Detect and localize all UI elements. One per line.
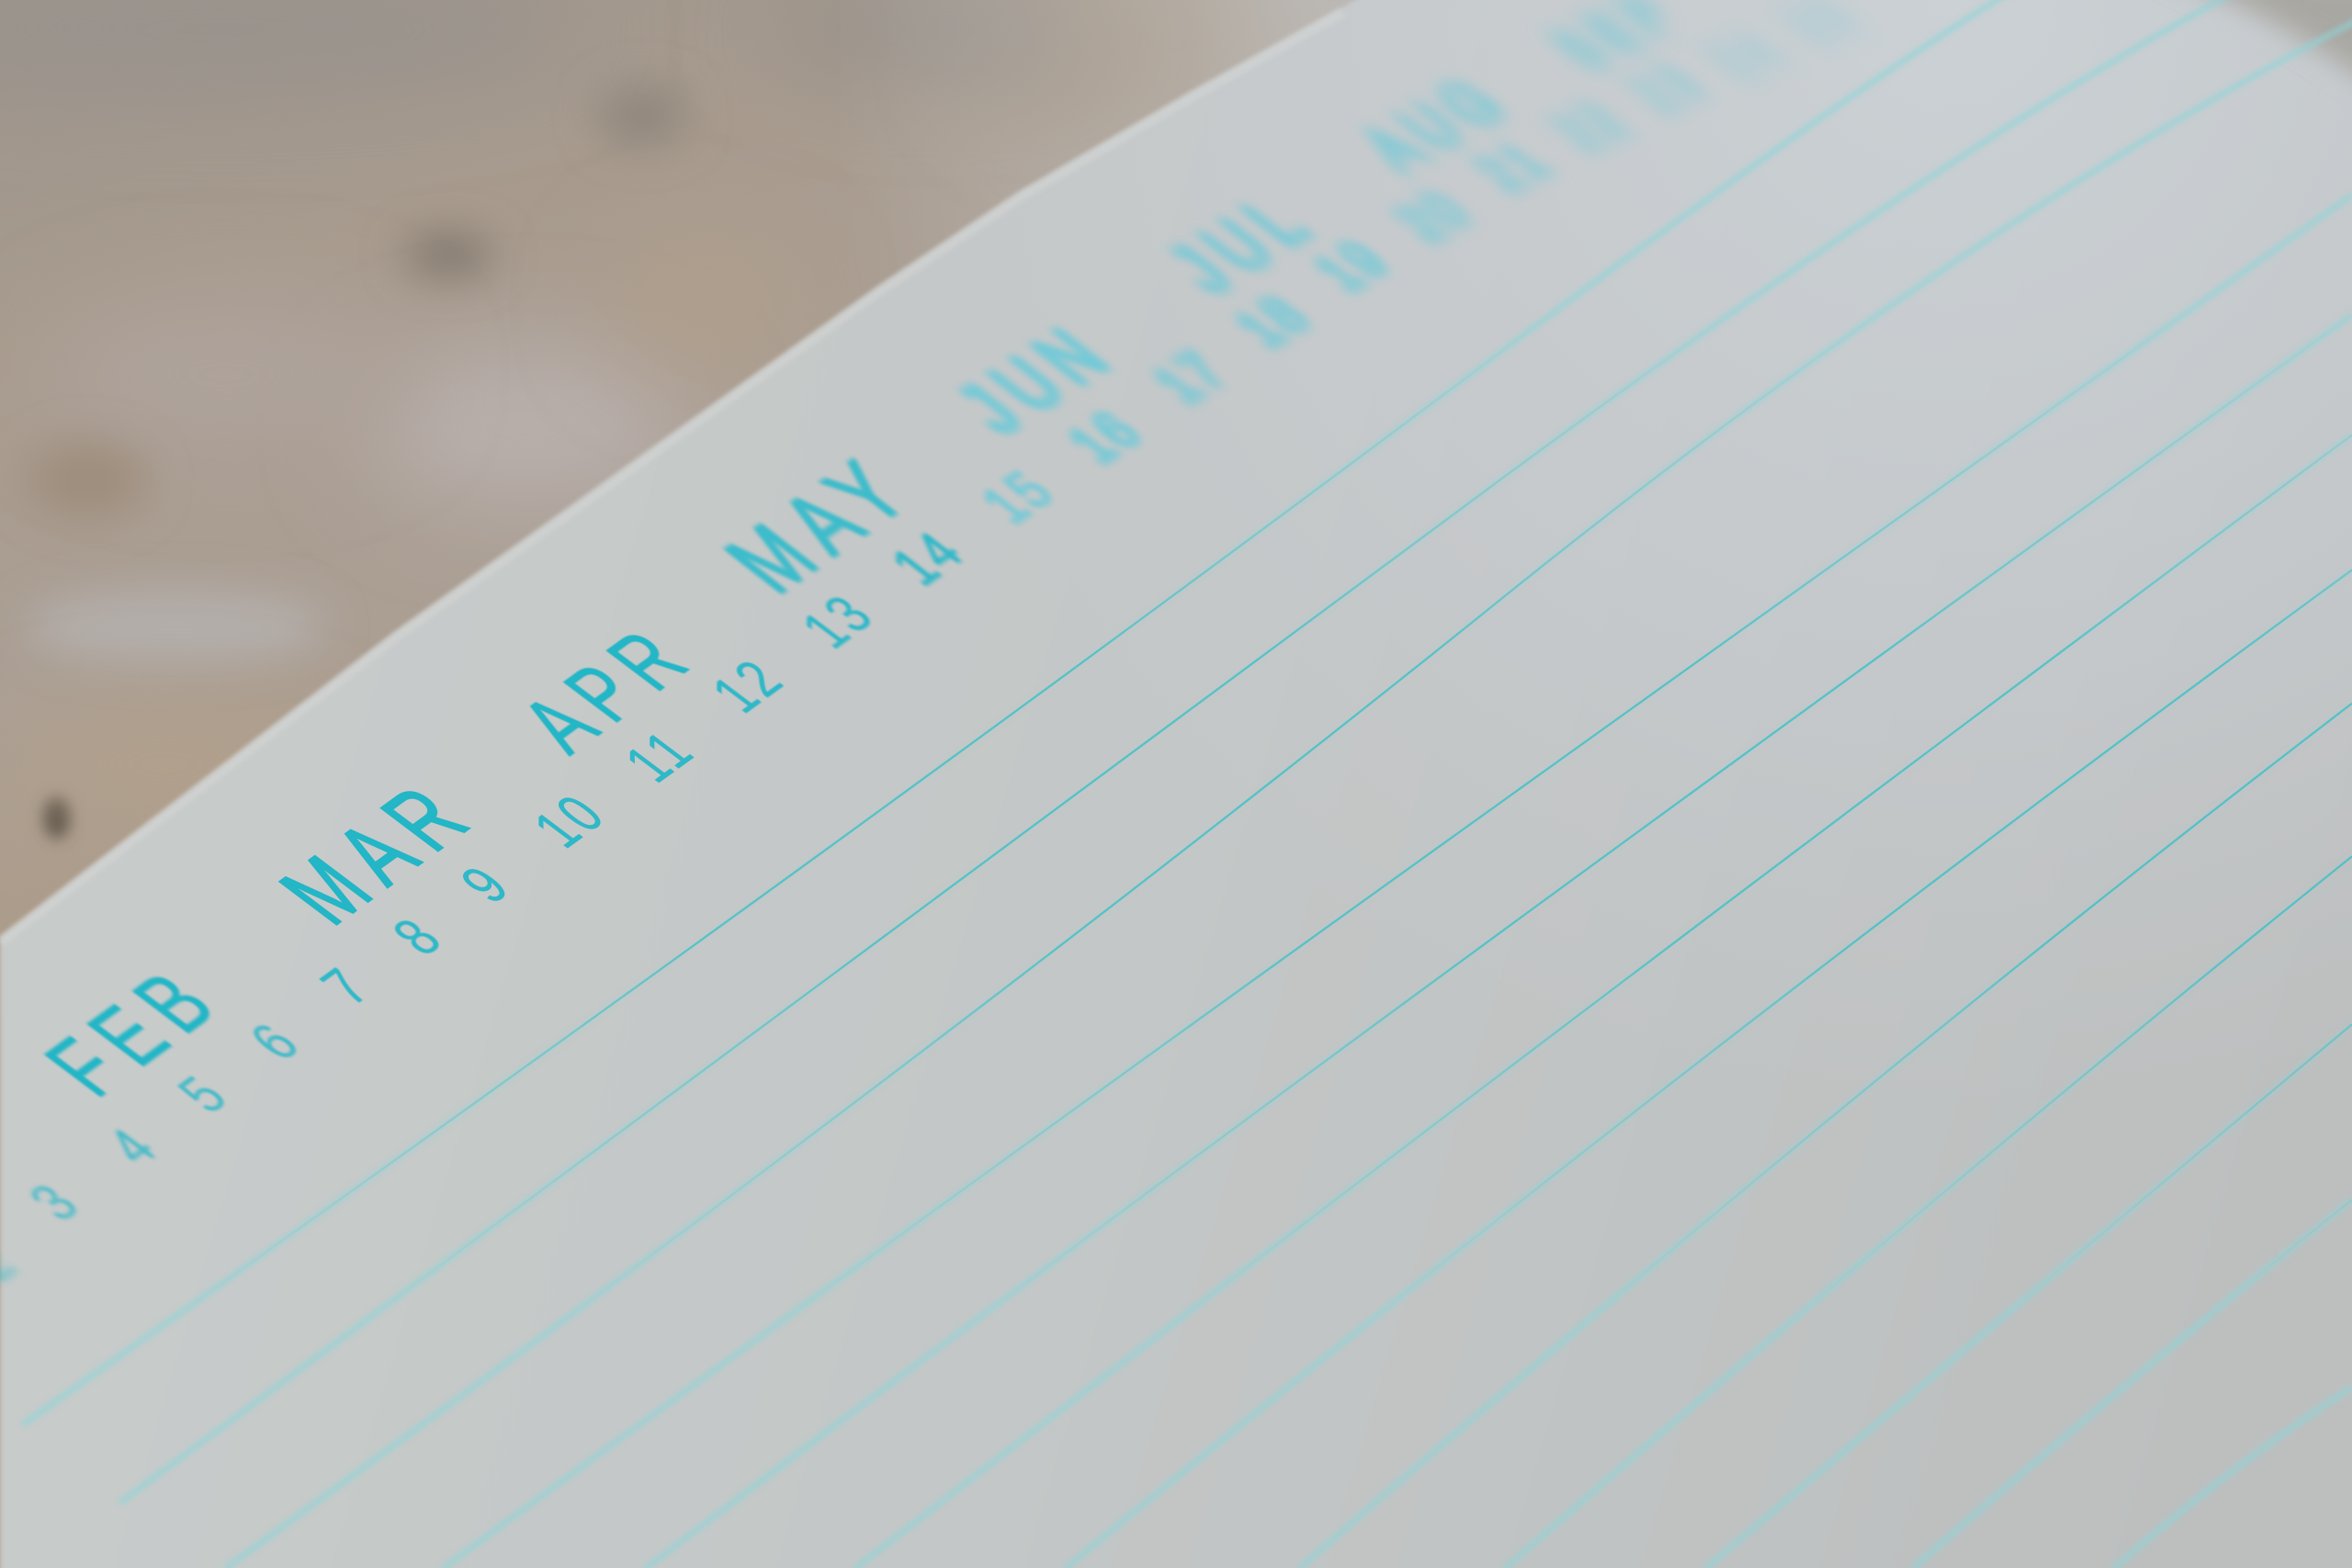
background object at top-right corner (2160, 0, 2352, 105)
date number row: 14 (877, 520, 979, 596)
date number row: 18 (1221, 285, 1326, 358)
date number row (0, 0, 1876, 1292)
date number row: 4 (94, 1116, 173, 1176)
date number row: 5 (164, 1064, 243, 1123)
date number row: 17 (1139, 339, 1242, 414)
month: JUL: JUL (1150, 178, 1335, 306)
date number row: 13 (787, 583, 889, 659)
date number row: 21 (1460, 130, 1566, 203)
date number row: 23 (1614, 53, 1723, 125)
month: AUG: AUG (1345, 62, 1529, 183)
month: MAR: MAR (257, 762, 501, 942)
date number row: 19 (1300, 229, 1406, 302)
date number row: 8 (379, 907, 458, 965)
date number row: 15 (967, 459, 1069, 535)
date number row: 24 (1691, 21, 1801, 92)
date number row: 9 (446, 853, 526, 913)
month: MAY: MAY (703, 437, 941, 610)
date number row: 10 (518, 783, 621, 859)
date number row: 7 (306, 955, 386, 1015)
ruled lines in focus (254, 354, 2352, 1260)
month: FEB: FEB (23, 948, 247, 1113)
month header row (23, 0, 1699, 1113)
month: JUN: JUN (938, 310, 1135, 447)
date number row: 22 (1538, 90, 1645, 162)
month: APR: APR (499, 607, 718, 769)
date number row: 11 (610, 719, 709, 793)
date number row: 6 (236, 1011, 316, 1071)
date number row: 3 (16, 1172, 96, 1231)
date number row: 20 (1381, 179, 1487, 253)
date number row: 16 (1054, 400, 1157, 474)
date number row: 12 (697, 648, 799, 724)
